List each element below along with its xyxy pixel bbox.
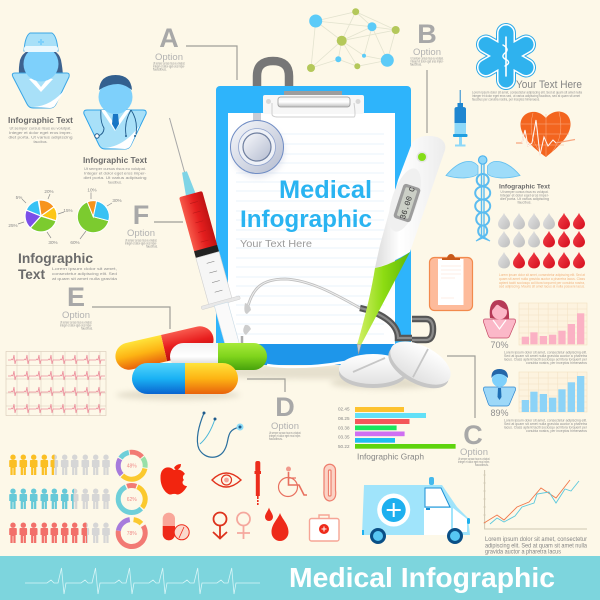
text: female stat caption: Lorem ipsum dolor sit amet, consectetur adipiscing elit. [504, 350, 587, 354]
ruled lines [236, 134, 384, 334]
text: doctor caption: Ut semper cursus risus eu volutpat. [84, 167, 146, 171]
icon: male symbol [213, 512, 227, 538]
pie chart: three slices: 30% [112, 198, 122, 203]
option C: faucibus. [475, 463, 489, 467]
clip [263, 91, 364, 117]
icon: apple [160, 464, 187, 495]
horizontal bar chart: 03.38 [338, 426, 350, 430]
text: your text here (top right): Your Text Here [516, 79, 582, 91]
pie chart: five slices [8, 189, 73, 245]
capsule: blue and orange [132, 363, 238, 394]
text: nurse caption: Integer et dolor eget eros imper- [9, 131, 73, 135]
text: doctor caption: faucibus. [108, 180, 122, 184]
percent: 70%: 70% [490, 340, 509, 350]
option A [153, 23, 237, 80]
text: male stat caption: lacus. Class aptent taciti sociosqu ad litora torquent per [504, 426, 588, 430]
capsules [113, 324, 267, 400]
text: pie chart caption: consectetur adipiscing elit. Sed [52, 271, 117, 276]
text: pie chart caption: Lorem ipsum dolor sit amet, [52, 266, 117, 271]
icon: woman [483, 300, 516, 338]
option B: faucibus. [410, 62, 422, 66]
option E: Integer et dolor eget eros imper- [60, 324, 93, 328]
text: female stat caption: lacus. Class aptent taciti sociosqu ad litora torquent per [504, 358, 588, 362]
clipboard shadow [200, 365, 430, 379]
text: graph caption: Infographic Graph [357, 452, 424, 462]
text: nurse caption [8, 116, 73, 144]
option C: Integer et dolor eget eros imper- [458, 460, 491, 464]
text: pie chart caption: Infographic [18, 251, 94, 266]
horizontal bar chart: 50.22 [338, 444, 350, 449]
text: male stat caption: conubia nostra, per inceptos himenaeos [526, 429, 587, 433]
capsule: orange and red [113, 324, 216, 372]
display panel [382, 165, 428, 235]
icon: ambulance [362, 477, 470, 544]
option F: F [133, 200, 149, 230]
text: line chart caption: gravida auctor a pharetra lacus [485, 548, 561, 556]
stethoscope chest piece [230, 113, 285, 178]
option D [269, 392, 302, 441]
panel: male stat [483, 369, 588, 433]
text: caduceus caption: faucibus. [517, 200, 532, 204]
horizontal bar chart [338, 406, 456, 449]
option B: B [417, 19, 437, 49]
option D: Option [271, 421, 299, 432]
text: nurse caption: diet porta. Ut varius adipiscing [8, 136, 73, 140]
ecg line [25, 568, 260, 594]
text: drops caption: Lorem ipsum dolor sit amet, consectetur adipiscing elit. Sed at [499, 273, 585, 277]
option B [410, 19, 444, 133]
heading: clipboard title [240, 176, 372, 233]
barrel marks [190, 201, 209, 242]
body [375, 136, 445, 268]
text: your text here (top right): faucibus per conubia nostra, per inceptos himenaeos. [472, 98, 540, 102]
clear barrel marks [207, 261, 222, 292]
option F: Ut semper cursus risus eu volutpat. [125, 238, 157, 242]
icon: star of life [486, 33, 526, 80]
text: line chart caption [485, 536, 588, 556]
text: caduceus caption [499, 184, 551, 204]
flange [201, 296, 240, 310]
clipboard [216, 86, 411, 365]
option F: Option [127, 228, 155, 239]
thermometer [357, 136, 445, 354]
stethoscope tube on paper [242, 279, 433, 367]
option D connector [247, 379, 285, 392]
ecg grid chart [6, 352, 106, 416]
pictogram rows [9, 454, 110, 543]
icon: thermometer outline [324, 464, 336, 501]
text: line chart caption: adipiscing elit. Sed at quam sit amet nulla [485, 542, 588, 550]
text: pie chart caption [18, 251, 118, 282]
pie chart: five slices: 15% [63, 208, 73, 213]
icon: eye [212, 473, 241, 487]
option D: faucibus. [269, 437, 283, 441]
option C [458, 420, 491, 467]
option A: A [159, 23, 179, 53]
heading: clipboard title: Medical [279, 176, 372, 204]
option F [125, 200, 183, 248]
option E: Ut semper cursus risus eu volutpat. [60, 320, 92, 324]
bar chart: blue [519, 372, 587, 412]
text: nurse caption: Infographic Text [8, 116, 73, 125]
left tablet [339, 354, 407, 388]
icon: first aid kit [310, 515, 339, 541]
text: caduceus caption: Ut semper cursus risus eu volutpat. [500, 190, 549, 194]
text: doctor caption: diet porta. Ut varius adipiscing [84, 176, 147, 180]
stethoscope tube behind clipboard [257, 61, 289, 125]
option D: Ut semper cursus risus eu volutpat. [269, 431, 301, 435]
text: caduceus caption: diet porta. Ut varius adipiscing [500, 197, 549, 201]
donut chart: 62% [113, 480, 151, 518]
bar chart: pink [519, 303, 587, 345]
text: doctor caption [83, 156, 147, 184]
network diagram [307, 8, 400, 72]
plunger rod [214, 302, 241, 354]
icon: wheelchair [278, 466, 307, 496]
text: pie chart caption: Text [18, 267, 45, 282]
text: drops caption: sed adipiscing. Mauris sit amet lacus at nulla posuere lacus. [499, 284, 585, 288]
pie chart: three slices: 10% [87, 188, 97, 192]
donut chart: 48%: 48% [127, 464, 137, 470]
clear barrel [196, 252, 232, 305]
pie chart: three slices [70, 188, 122, 245]
green tip [357, 252, 410, 345]
option C connector [447, 356, 475, 418]
text: caduceus caption: Infographic Text [499, 184, 551, 190]
text: line chart caption: Lorem ipsum dolor sit amet, consectetur [485, 536, 587, 543]
text: female stat caption: conubia nostra, per inceptos himenaeos [526, 361, 587, 365]
horizontal bar chart: 02.45 [338, 406, 350, 412]
pie chart: five slices: 25% [8, 223, 18, 228]
panel: female stat [483, 300, 588, 365]
option C: C [463, 420, 483, 450]
icon: blood drops pair [265, 508, 288, 541]
option F: faucibus. [146, 244, 158, 248]
option A: Option [155, 52, 183, 63]
right tablet [381, 333, 458, 397]
icon: man [483, 369, 516, 406]
row: yellow people [9, 454, 110, 475]
option A: faucibus. [153, 68, 167, 72]
reading: 36.00 C [399, 186, 418, 221]
option D: D [275, 392, 295, 422]
option C: Option [460, 447, 488, 458]
icon grid: blood drops [498, 213, 585, 268]
icon: nurse avatar [12, 33, 69, 108]
text: drops caption [499, 273, 585, 288]
text: doctor caption: Integer et dolor eget eros imper- [84, 172, 147, 176]
text: male stat caption: Sed at quam sit amet nulla gravida auctor a pharetra [504, 422, 587, 426]
icon: heart with ecg [516, 112, 575, 157]
option A: Ut semper cursus risus eu volutpat. [153, 62, 185, 66]
board [216, 86, 411, 365]
text: your text here (top right): Integer et dolor eget eros sed, ut varius adipiscing faucibus, sed at quam sit amet [472, 94, 580, 98]
option E: E [67, 282, 85, 312]
option F: Integer et dolor eget eros imper- [125, 242, 158, 246]
text: doctor caption: Infographic Text [83, 156, 147, 165]
footer band [0, 556, 600, 600]
option B: Option [413, 47, 441, 58]
text: your text here (top right) [472, 79, 582, 102]
text: female stat caption: Sed at quam sit amet nulla gravida auctor a pharetra [504, 354, 587, 358]
icon: dropper [254, 461, 261, 505]
pie chart: five slices: 30% [48, 240, 58, 245]
donut chart: 62%: 62% [127, 497, 137, 503]
donut chart: 78%: 78% [127, 531, 137, 537]
row: salmon people [9, 522, 110, 543]
option E: faucibus. [81, 326, 93, 330]
hub [180, 171, 196, 196]
horizontal bar chart: 08.25 [338, 416, 350, 421]
option B: Ut semper cursus risus eu volutpat. [410, 56, 444, 60]
option B: Integer et dolor eget eros imper- [410, 60, 444, 64]
icon: small clipboard [430, 254, 472, 310]
icon: female symbol [237, 512, 250, 539]
icon: capsule and tablet [163, 513, 189, 540]
option D: Integer et dolor eget eros imper- [269, 434, 302, 438]
text: male stat caption: Lorem ipsum dolor sit amet, consectetur adipiscing elit. [504, 418, 587, 422]
pie chart: five slices: 5% [16, 195, 22, 200]
donut chart: 78% [113, 514, 150, 552]
paper [228, 113, 395, 344]
syringe [150, 113, 254, 358]
red barrel [179, 191, 217, 252]
option E [60, 282, 170, 330]
pie chart: five slices: 20% [44, 189, 54, 194]
icon: doctor avatar [84, 75, 146, 149]
text: caduceus caption: Integer et dolor eget eros imper- [500, 194, 550, 198]
horizontal bar chart: 03.35 [338, 434, 350, 440]
text: clipboard subtitle: Your Text Here [240, 238, 312, 250]
text: drops caption: quam sit amet nulla gravida auctor a pharetra lacus. Class [499, 277, 585, 281]
percent: 89%: 89% [490, 408, 509, 418]
text: nurse caption: Ut semper cursus risus eu volutpat. [10, 126, 72, 130]
led [416, 152, 428, 162]
small stethoscope icon [197, 412, 244, 457]
text: male stat caption [504, 418, 588, 433]
needle [169, 118, 185, 174]
text: your text here (top right): Lorem ipsum dolor sit amet, consectetur adipiscing elit. Sed at quam sit amet nulla [472, 90, 582, 94]
option A: Integer et dolor eget eros imper- [153, 64, 186, 68]
tablets [330, 333, 458, 397]
pie chart: three slices: 60% [70, 240, 80, 245]
option C: Ut semper cursus risus eu volutpat. [458, 457, 490, 461]
heading: clipboard title: Infographic [240, 206, 372, 233]
icon: caduceus [446, 156, 520, 241]
donut chart: 48% [113, 447, 151, 485]
heading: footer title: Medical Infographic [289, 562, 555, 593]
text: pie chart caption: at quam sit amet nulla gravida [52, 276, 118, 281]
line chart [483, 470, 587, 529]
plunger seal [194, 245, 219, 258]
option E: Option [62, 310, 90, 321]
text: nurse caption: faucibus. [33, 140, 48, 144]
row: teal people [9, 488, 110, 509]
text: female stat caption [504, 350, 588, 365]
text: drops caption: aptent taciti sociosqu ad litora torquent per conubia nostra, [499, 281, 585, 285]
capsule: white and green [170, 343, 267, 370]
icon: small syringe [453, 90, 468, 146]
